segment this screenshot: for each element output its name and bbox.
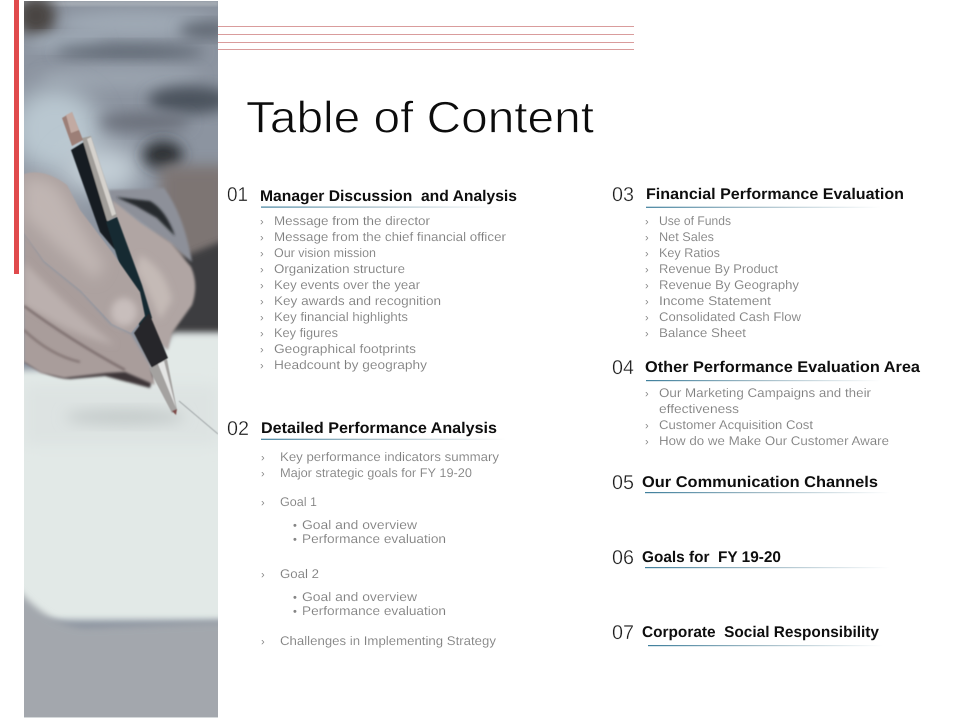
number 03: 03 <box>612 184 634 206</box>
list 03: › <box>645 232 649 244</box>
list 03: Revenue By Geography <box>659 278 800 292</box>
list 01: Key financial highlights <box>274 310 408 324</box>
number 07: 07 <box>612 622 634 644</box>
list 03: Revenue By Product <box>659 262 779 276</box>
list 01: Our vision mission <box>274 246 376 260</box>
underline 02 <box>261 439 506 440</box>
section 03 <box>612 184 904 340</box>
section 06 <box>612 547 890 569</box>
list 03: › <box>645 216 649 228</box>
list 03 <box>645 214 802 340</box>
list 04: › <box>645 388 649 400</box>
number 04: 04 <box>612 357 634 379</box>
list 04: › <box>645 436 649 448</box>
list 03: › <box>645 312 649 324</box>
list 03: › <box>645 328 649 340</box>
list 02: › <box>261 452 265 464</box>
number 01: 01 <box>227 184 248 206</box>
underline 03 <box>646 207 881 208</box>
list 02: Challenges in Implementing Strategy <box>280 634 497 648</box>
lower fingers <box>24 232 155 385</box>
heading 06: Goals for FY 19-20 <box>642 549 781 566</box>
index finger <box>24 172 145 333</box>
number 05: 05 <box>612 472 634 494</box>
list 02: • <box>293 534 297 546</box>
list 01: Key figures <box>274 326 338 340</box>
list 01: › <box>260 232 264 244</box>
underline 04 <box>646 380 881 381</box>
decorative lines top <box>218 26 634 50</box>
shadow under hand <box>24 362 154 390</box>
heading 04: Other Performance Evaluation Area <box>645 359 920 376</box>
paper <box>24 328 218 624</box>
section 05 <box>612 472 890 494</box>
section 07 <box>612 622 883 646</box>
underline 06 <box>645 567 890 568</box>
list 01 <box>260 214 506 372</box>
list 02: › <box>261 636 265 648</box>
list 01: › <box>260 296 264 308</box>
section 02 <box>227 418 506 648</box>
pen <box>62 112 218 434</box>
cuff <box>108 188 192 262</box>
list 02: Performance evaluation <box>302 604 446 618</box>
list 01: Geographical footprints <box>274 342 416 356</box>
list 04 <box>645 386 889 448</box>
right finger <box>112 200 195 350</box>
heading 02: Detailed Performance Analysis <box>261 420 497 437</box>
list 01: › <box>260 264 264 276</box>
number 06: 06 <box>612 547 634 569</box>
list 04: effectiveness <box>659 402 739 416</box>
underline 07 <box>648 645 883 646</box>
list 01: › <box>260 248 264 260</box>
section 01 <box>227 184 517 372</box>
list 04: › <box>645 420 649 432</box>
list 01: › <box>260 312 264 324</box>
list 03: Net Sales <box>659 230 714 244</box>
section 04 <box>612 357 920 448</box>
list 02: › <box>261 468 265 480</box>
list 01: › <box>260 216 264 228</box>
title: Table of Content <box>246 94 595 142</box>
list 02: Goal 1 <box>280 495 317 509</box>
list 03: › <box>645 280 649 292</box>
red accent bar <box>14 0 19 274</box>
list 03: › <box>645 248 649 260</box>
list 01: › <box>260 360 264 372</box>
list 02: Major strategic goals for FY 19-20 <box>280 466 472 480</box>
list 01: Organization structure <box>274 262 405 276</box>
list 02: Key performance indicators summary <box>280 450 500 464</box>
list 01: Key events over the year <box>274 278 420 292</box>
list 02: Goal 2 <box>280 567 319 581</box>
list 01: › <box>260 280 264 292</box>
list 02: › <box>261 497 265 509</box>
list 03: › <box>645 296 649 308</box>
list 02 <box>261 450 500 648</box>
list 01: Headcount by geography <box>274 358 428 372</box>
list 01: › <box>260 328 264 340</box>
underline 05 <box>645 492 890 493</box>
list 02: › <box>261 569 265 581</box>
list 04: Customer Acquisition Cost <box>659 418 814 432</box>
list 02: • <box>293 606 297 618</box>
underline 01 <box>261 206 501 208</box>
list 01: Key awards and recognition <box>274 294 441 308</box>
list 03: Balance Sheet <box>659 326 747 340</box>
heading 03: Financial Performance Evaluation <box>646 186 904 203</box>
heading 05: Our Communication Channels <box>642 474 878 491</box>
number 02: 02 <box>227 418 249 440</box>
list 02: Goal and overview <box>302 518 418 532</box>
list 01: Message from the chief financial officer <box>274 230 506 244</box>
list 03: Use of Funds <box>659 214 731 228</box>
list 03: Income Statement <box>659 294 772 308</box>
list 02: • <box>293 592 297 604</box>
list 02: Goal and overview <box>302 590 418 604</box>
heading 01: Manager Discussion and Analysis <box>260 188 517 205</box>
list 03: Consolidated Cash Flow <box>659 310 802 324</box>
list 02: Performance evaluation <box>302 532 446 546</box>
photo: hand writing with pen <box>24 1 218 718</box>
list 01: Message from the director <box>274 214 430 228</box>
list 04: How do we Make Our Customer Aware <box>659 434 889 448</box>
list 03: › <box>645 264 649 276</box>
table below paper <box>24 591 218 717</box>
list 02: • <box>293 520 297 532</box>
list 04: Our Marketing Campaigns and their <box>659 386 871 400</box>
list 03: Key Ratios <box>659 246 720 260</box>
heading 07: Corporate Social Responsibility <box>642 624 879 641</box>
list 01: › <box>260 344 264 356</box>
